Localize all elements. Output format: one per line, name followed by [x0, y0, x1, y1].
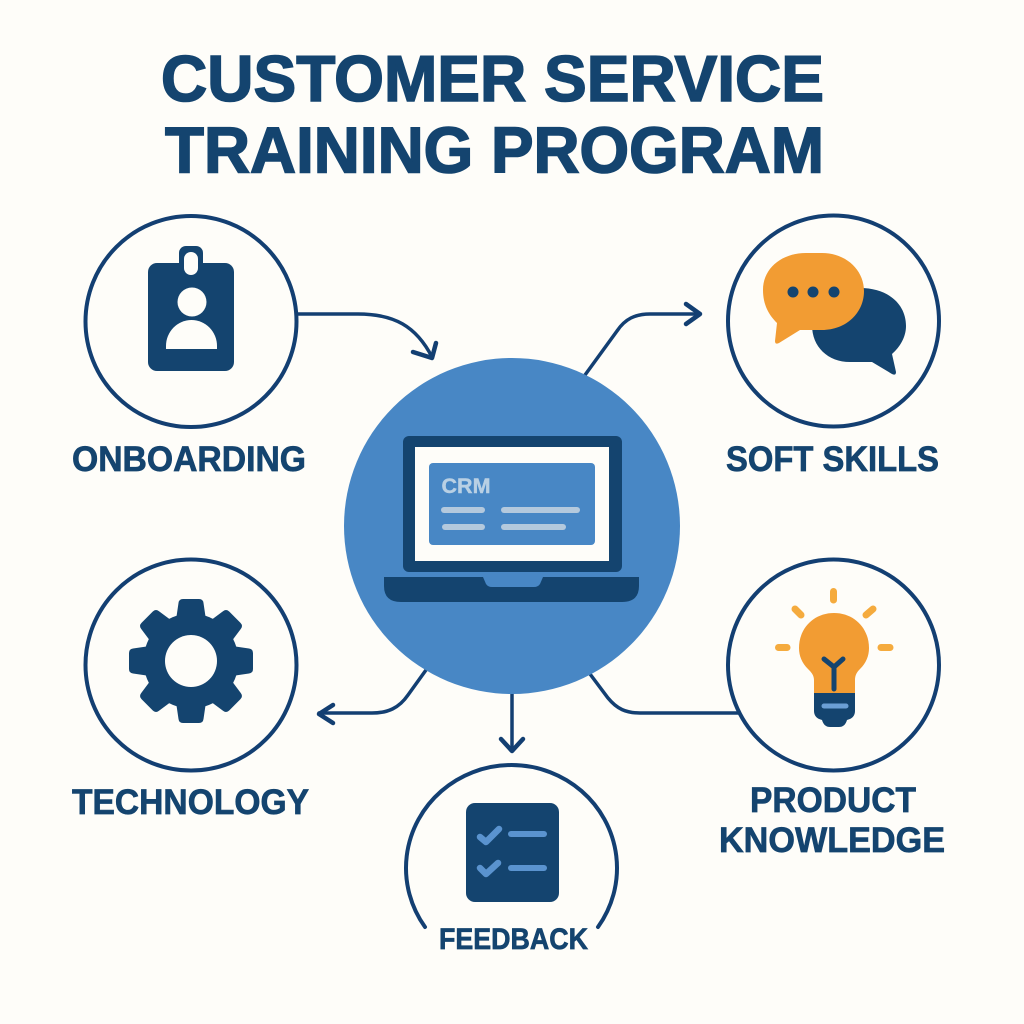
CRM label: CRM: [442, 475, 490, 498]
onboarding label: ONBOARDING: [72, 440, 306, 479]
icon: gear: [129, 599, 253, 723]
connector: center to product knowledge: [590, 674, 738, 713]
icon: speech bubbles: [763, 253, 906, 375]
panel: product knowledge: [719, 560, 945, 860]
laptop base: [384, 577, 639, 602]
arrow: center to feedback: [501, 693, 523, 751]
product knowledge label: PRODUCT: [750, 781, 916, 820]
icon: checklist: [466, 803, 559, 902]
panel: technology: [72, 560, 309, 822]
panel: feedback: [406, 765, 617, 956]
title: [161, 42, 824, 186]
technology ring: [86, 560, 296, 770]
panel: central CRM laptop: [344, 358, 680, 694]
icon: light bulb: [778, 592, 890, 727]
feedback label: FEEDBACK: [439, 923, 588, 956]
title: CUSTOMER SERVICE: [161, 42, 824, 115]
technology label: TECHNOLOGY: [72, 783, 309, 822]
panel: onboarding: [72, 216, 306, 479]
icon: ID badge: [148, 246, 234, 371]
arrow: center to technology: [319, 670, 426, 723]
title: TRAINING PROGRAM: [165, 114, 824, 186]
central blue circle: [344, 358, 680, 694]
onboarding ring: [86, 216, 296, 427]
soft skills ring: [728, 216, 939, 426]
product knowledge ring: [728, 560, 939, 770]
feedback open ring: [406, 765, 617, 927]
laptop screen: [403, 436, 622, 572]
product knowledge label: [719, 781, 945, 860]
product knowledge label: KNOWLEDGE: [719, 821, 945, 860]
soft skills label: SOFT SKILLS: [726, 440, 939, 479]
panel: soft skills: [726, 216, 939, 479]
arrow: onboarding to center: [298, 314, 436, 358]
arrow: center to soft skills: [585, 304, 700, 375]
CRM text lines: [444, 510, 577, 527]
